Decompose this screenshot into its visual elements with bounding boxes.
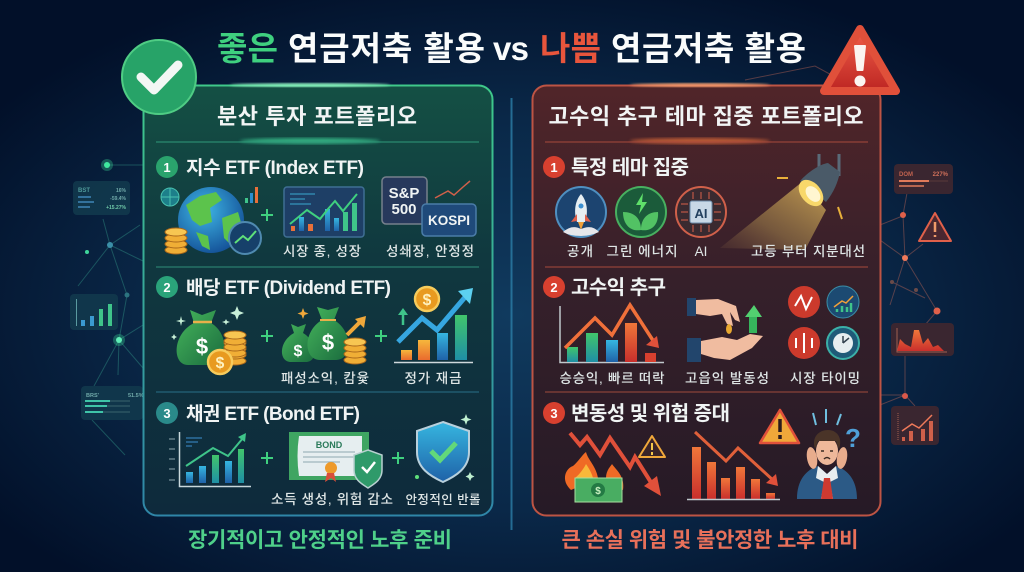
icon: warning sign bbox=[760, 410, 799, 443]
icon: right small warning bbox=[919, 213, 951, 241]
icon: index cards: S&P bbox=[389, 185, 419, 202]
captions: AI bbox=[695, 244, 707, 259]
icon: bond chart bbox=[169, 432, 251, 486]
icon: worried investor: ? bbox=[845, 423, 861, 453]
plus bbox=[375, 330, 387, 342]
icon: AI chip theme: AI bbox=[694, 206, 708, 221]
section 2 header: 배당 ETF (Dividend ETF) bbox=[186, 277, 391, 299]
card: left progress bbox=[81, 386, 144, 420]
title: 나쁨 bbox=[540, 30, 601, 67]
card: right area chart bbox=[891, 323, 954, 356]
section 3 header: 3 bbox=[550, 406, 558, 421]
plus bbox=[261, 209, 273, 221]
section 2 header: 고수익 추구 bbox=[571, 276, 666, 299]
heading: 분산 투자 포트폴리오 bbox=[217, 104, 417, 129]
caption: 시장 종, 성장 bbox=[283, 244, 361, 259]
badge: warning triangle bbox=[824, 29, 896, 91]
icon: burning money bbox=[565, 433, 665, 502]
card: left stats bbox=[73, 181, 130, 215]
icon: money bag with coins: $ bbox=[196, 334, 208, 359]
captions: 그린 에너지 bbox=[606, 244, 678, 259]
icon: growth chart card bbox=[284, 187, 364, 237]
icon: timing badges bbox=[788, 286, 859, 359]
section 1 header: 1 bbox=[163, 160, 171, 175]
icon: index cards: 500 bbox=[391, 201, 417, 218]
caption: 고읍익 발동성 bbox=[685, 371, 769, 386]
icon: green energy theme bbox=[616, 187, 666, 237]
card: left stats: BST bbox=[78, 188, 90, 194]
section 2 header: 2 bbox=[550, 280, 558, 295]
exclamation mark bbox=[934, 222, 936, 237]
title: 연금저축 활용 bbox=[611, 30, 806, 67]
card: left bars bbox=[70, 294, 118, 330]
card: left progress: BRS' bbox=[86, 393, 100, 399]
panel: bad portfolio bbox=[532, 83, 880, 516]
icon: worried investor bbox=[797, 409, 861, 499]
center divider bbox=[510, 98, 512, 530]
card: left progress: 51.5% bbox=[128, 393, 144, 399]
caption: 소득 생성, 위험 감소 bbox=[271, 492, 393, 507]
section 3 header: 채권 ETF (Bond ETF) bbox=[186, 403, 360, 425]
icon: hands and coin bbox=[687, 298, 763, 362]
title: vs bbox=[493, 30, 529, 67]
icon: reinvestment growth chart bbox=[394, 287, 473, 362]
section 3 header: 3 bbox=[163, 406, 171, 421]
right network decoration bbox=[745, 66, 954, 445]
plus bbox=[261, 330, 273, 342]
card: right stats: 227% bbox=[933, 172, 949, 178]
icon: shield bbox=[415, 414, 474, 482]
icon: two money bags bbox=[282, 307, 366, 364]
icon: two money bags: $ bbox=[322, 330, 334, 355]
icon: falling bars bbox=[687, 432, 780, 500]
card: left stats: -59.4% bbox=[110, 196, 127, 202]
card: right stats: DOM bbox=[899, 172, 913, 178]
card: left stats: 16% bbox=[116, 188, 127, 194]
card: right mini chart bbox=[891, 406, 939, 445]
icon: falling profit chart bbox=[560, 305, 664, 362]
icon: rocket theme bbox=[556, 187, 606, 237]
caption: 시장 타이밍 bbox=[790, 371, 860, 386]
badge: check mark bbox=[122, 40, 196, 114]
section 1 header: 1 bbox=[550, 160, 558, 175]
icon: bond certificate with shield bbox=[289, 432, 382, 488]
caption: 안정적인 반롤 bbox=[406, 493, 480, 507]
section 2 header: 2 bbox=[163, 280, 171, 295]
icon: AI chip theme bbox=[676, 187, 726, 237]
icon: spotlight bbox=[720, 154, 842, 250]
captions bbox=[567, 244, 707, 259]
caption: 정가 재금 bbox=[404, 371, 462, 386]
caption: 성쇄장, 안정정 bbox=[386, 244, 474, 259]
section 1 header: 특정 테마 집중 bbox=[571, 156, 689, 179]
plus bbox=[392, 452, 404, 464]
icon: money bag with coins bbox=[171, 306, 246, 374]
plus bbox=[261, 452, 273, 464]
caption: 고등 부터 지분대선 bbox=[751, 244, 865, 259]
icon: burning money: $ bbox=[595, 486, 601, 497]
card: right stats bbox=[894, 164, 953, 194]
icon: index cards bbox=[382, 177, 476, 236]
caption: 패성소익, 캄윷 bbox=[281, 371, 369, 386]
card: left stats: +15.27% bbox=[106, 205, 127, 211]
footer: good conclusion: 장기적이고 안정적인 노후 준비 bbox=[188, 529, 452, 552]
panel: good portfolio bbox=[144, 83, 492, 516]
captions: 공개 bbox=[567, 244, 593, 259]
footer: bad conclusion: 큰 손실 위험 및 불안정한 노후 대비 bbox=[562, 529, 858, 552]
icon: index cards: KOSPI bbox=[428, 213, 470, 228]
title: 연금저축 활용 bbox=[288, 30, 485, 67]
icon: two money bags: $ bbox=[294, 343, 303, 360]
title bbox=[217, 30, 806, 67]
icon: bond certificate with shield: BOND bbox=[316, 440, 343, 450]
heading: 고수익 추구 테마 집중 포트폴리오 bbox=[548, 104, 864, 129]
section 3 header: 변동성 및 위험 증대 bbox=[571, 402, 730, 425]
caption: 승승익, 빠르 떠락 bbox=[560, 371, 664, 386]
section 1 header: 지수 ETF (Index ETF) bbox=[186, 157, 364, 179]
icon: globe with coins bbox=[161, 187, 261, 254]
title: 좋은 bbox=[217, 30, 278, 67]
left network decoration bbox=[70, 159, 145, 455]
